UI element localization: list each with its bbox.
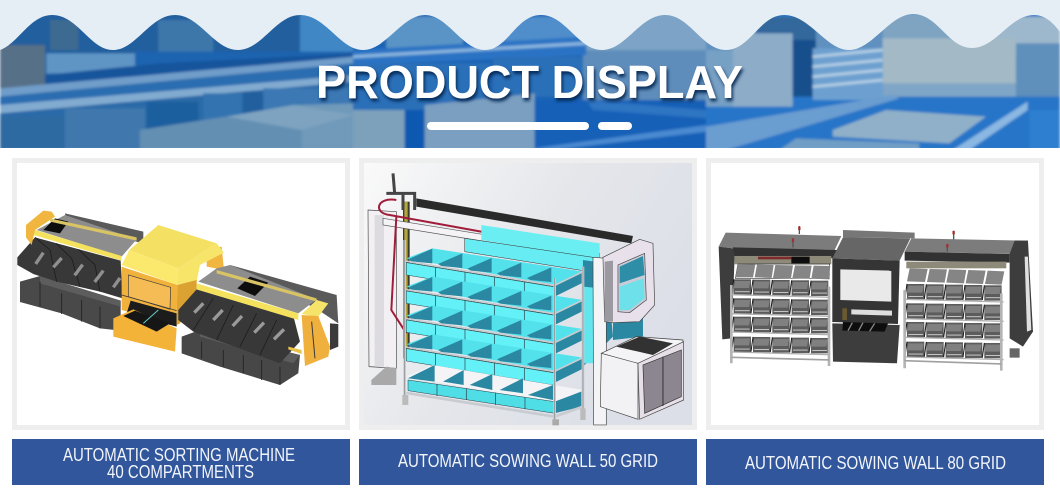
panel frame (14, 160, 348, 428)
caption: sorting machine (12, 439, 350, 485)
panel: automatic sowing wall 50 grid (362, 160, 694, 428)
panel frame (708, 160, 1042, 428)
caption: sowing wall 80 grid: AUTOMATIC SOWING WALL 80 GRID (745, 453, 1006, 473)
wave overlay (0, 0, 1060, 50)
illustration: cyan sowing wall (368, 173, 684, 425)
panel: automatic sowing wall 80 grid (708, 160, 1042, 428)
caption: sorting machine: AUTOMATIC SORTING MACHINE (63, 445, 295, 465)
illustration: dark sowing wall (719, 226, 1033, 371)
caption: sowing wall 50 grid (359, 439, 697, 485)
panel: automatic sorting machine (14, 160, 348, 428)
header banner (0, 0, 1060, 150)
caption: sowing wall 80 grid (706, 439, 1044, 485)
illustration: yellow sorting machine (17, 211, 338, 385)
panel frame (362, 160, 694, 428)
caption: sowing wall 50 grid: AUTOMATIC SOWING WALL 50 GRID (398, 451, 658, 471)
title: PRODUCT DISPLAY (316, 56, 743, 108)
banner photo: conveyor line with boxes (0, 14, 1060, 148)
title underline bars (427, 122, 632, 130)
caption: sorting machine: 40 COMPARTMENTS (107, 462, 254, 482)
